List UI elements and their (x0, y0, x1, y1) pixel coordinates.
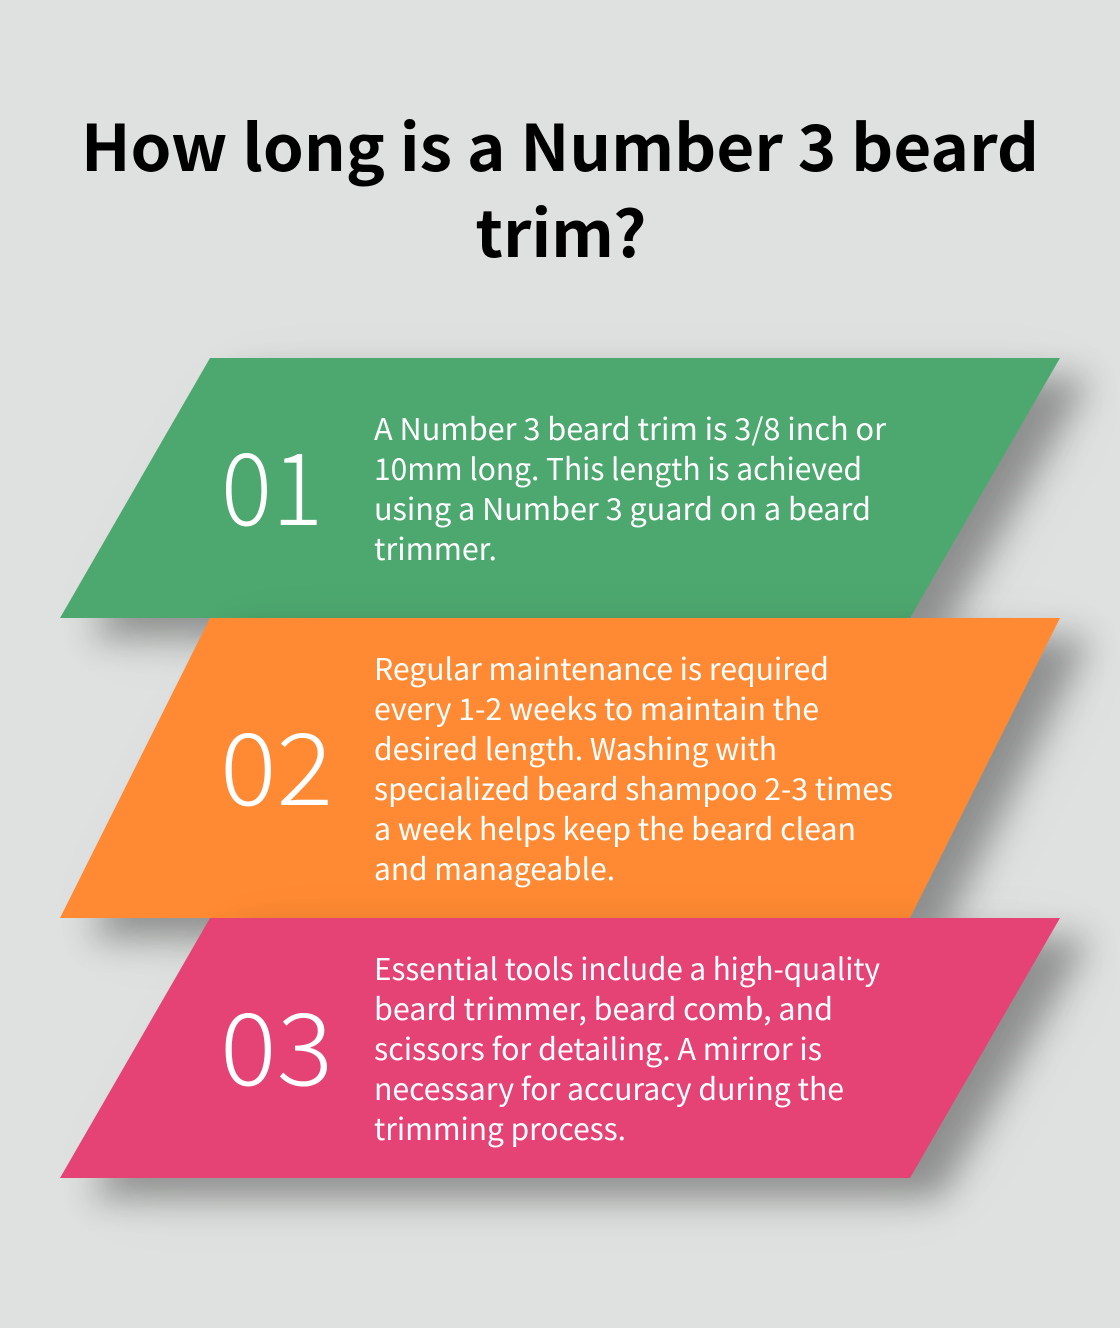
text: step 03: trimming process. (374, 1105, 626, 1149)
text: step 01: trimmer. (374, 525, 497, 569)
text: step 02: desired length. Washing with (374, 725, 777, 769)
text: step 02: every 1-2 weeks to maintain the (374, 685, 819, 729)
text: step 03: Essential tools include a high-quality (374, 945, 880, 989)
panel: step 03 (60, 918, 1090, 1198)
text: step 01: A Number 3 beard trim is 3/8 inch or (374, 405, 886, 449)
text: step 01: using a Number 3 guard on a beard (374, 485, 871, 529)
text: step 03 (374, 945, 880, 1149)
text: step 01 (374, 405, 886, 569)
text: step 02: specialized beard shampoo 2-3 times (374, 765, 893, 809)
panel: step 01 (60, 358, 1090, 638)
panel: step 02 (60, 618, 1090, 938)
text: step 02: Regular maintenance is required (374, 645, 829, 689)
title: How long is a Number 3 beard (81, 98, 1039, 190)
text: step 02 (374, 645, 893, 889)
text: step 02: and manageable. (374, 845, 615, 889)
number 03: 03 (220, 969, 333, 1114)
number 01: 01 (221, 409, 323, 554)
title: trim? (476, 184, 646, 276)
text: step 03: beard trimmer, beard comb, and (374, 985, 833, 1029)
text: step 03: scissors for detailing. A mirror is (374, 1025, 822, 1069)
text: step 03: necessary for accuracy during the (374, 1065, 844, 1109)
text: step 01: 10mm long. This length is achieved (374, 445, 862, 489)
title (81, 98, 1039, 276)
text: step 02: a week helps keep the beard clean (374, 805, 856, 849)
number 02: 02 (220, 689, 333, 834)
